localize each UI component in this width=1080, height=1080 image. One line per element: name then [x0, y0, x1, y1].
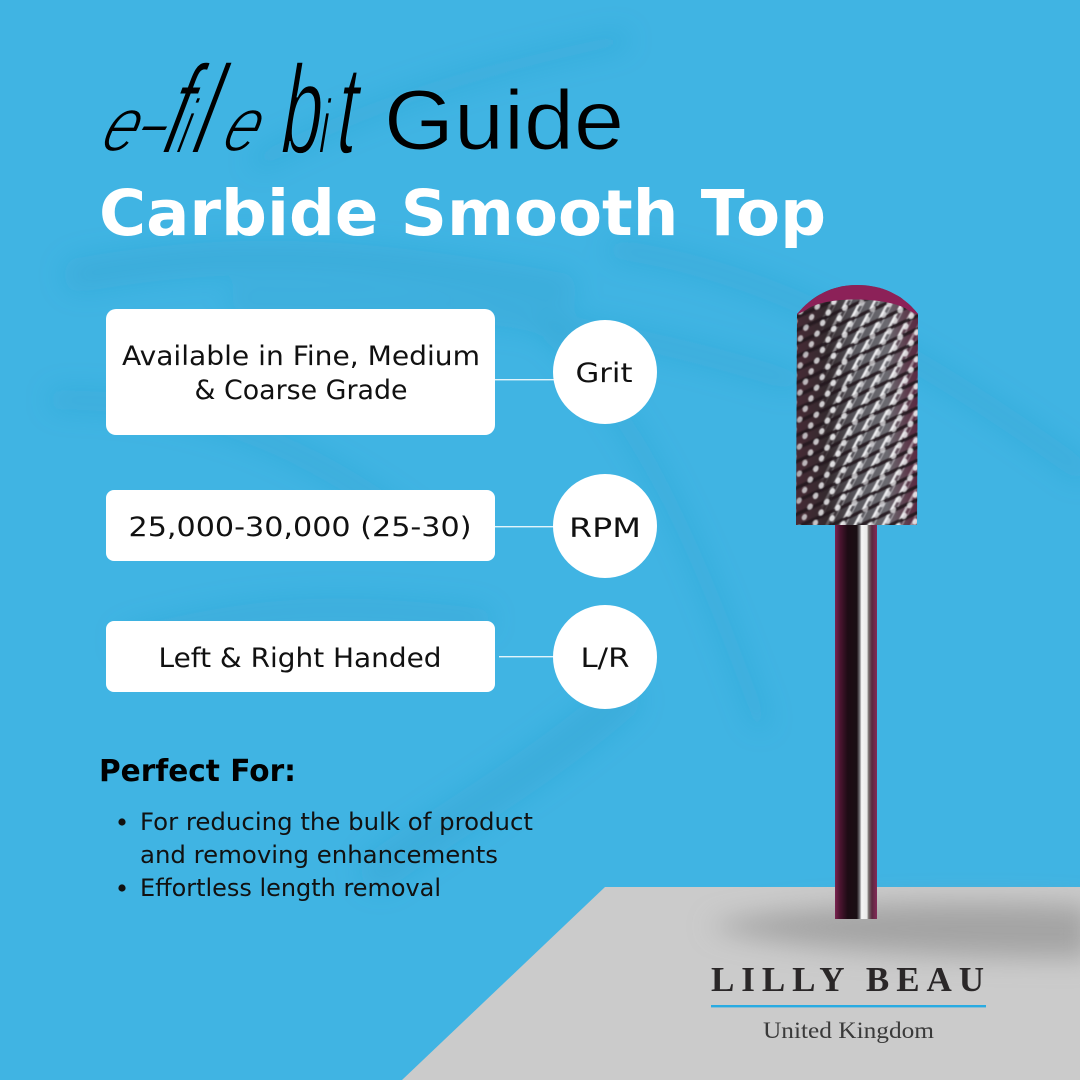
- title script: e-file bit: i: [171, 84, 205, 170]
- logo: Lilly Beau: United Kingdom: [763, 1018, 934, 1043]
- title script: e-file bit: b: [279, 39, 327, 180]
- badge: handedness: L/R: [580, 643, 630, 674]
- row: handedness: [106, 605, 657, 709]
- badge: grit: Grit: [576, 358, 632, 389]
- badge: grit: [553, 320, 657, 424]
- bit shank: [835, 522, 877, 919]
- floor shadow of the bit: [708, 903, 1080, 958]
- title script: e-file bit: f: [153, 41, 217, 181]
- bullet list: [118, 808, 533, 902]
- title script: e-file bit: e: [213, 82, 279, 168]
- badge: handedness: [553, 605, 657, 709]
- text box: handedness: Left & Right Handed: [158, 643, 442, 674]
- logo: Lilly Beau: [711, 960, 986, 1043]
- badge: RPM: [553, 474, 657, 578]
- title word: Guide: Guide: [384, 73, 624, 167]
- bullet list: For reducing the bulk of product: [140, 808, 533, 836]
- connector: grit: [495, 379, 555, 380]
- text box: handedness: [106, 621, 495, 692]
- badge: RPM: RPM: [569, 513, 641, 544]
- text box: grit: [106, 309, 495, 435]
- text box: RPM: [106, 490, 495, 561]
- title script: e-file bit: l: [183, 41, 238, 181]
- title script: e-file bit: [92, 39, 365, 181]
- row: grit: [106, 309, 657, 435]
- title script: e-file bit: e: [92, 82, 158, 168]
- heading: Perfect For: Perfect For:: [99, 754, 296, 789]
- grey floor panel: [402, 887, 1080, 1080]
- connector: handedness: [499, 656, 555, 657]
- bullet list: Effortless length removal: [140, 874, 441, 902]
- title script: e-file bit: t: [335, 39, 365, 180]
- bullet list: and removing enhancements: [140, 841, 498, 869]
- title: e-file bit Guide: [92, 39, 624, 181]
- row: RPM: [106, 474, 657, 578]
- connector: RPM: [495, 526, 555, 527]
- logo: Lilly Beau: LILLY BEAU: [711, 960, 984, 999]
- text box: RPM: 25,000-30,000 (25-30): [128, 512, 472, 543]
- title script: e-file bit: -: [127, 88, 181, 159]
- subtitle: Carbide Smooth Top: Carbide Smooth Top: [99, 177, 826, 250]
- text box: grit: & Coarse Grade: [194, 375, 408, 406]
- bit head: [796, 285, 918, 525]
- text box: grit: Available in Fine, Medium: [122, 341, 480, 372]
- product photo: carbide bit: [796, 285, 918, 919]
- title script: e-file bit: i: [318, 84, 333, 170]
